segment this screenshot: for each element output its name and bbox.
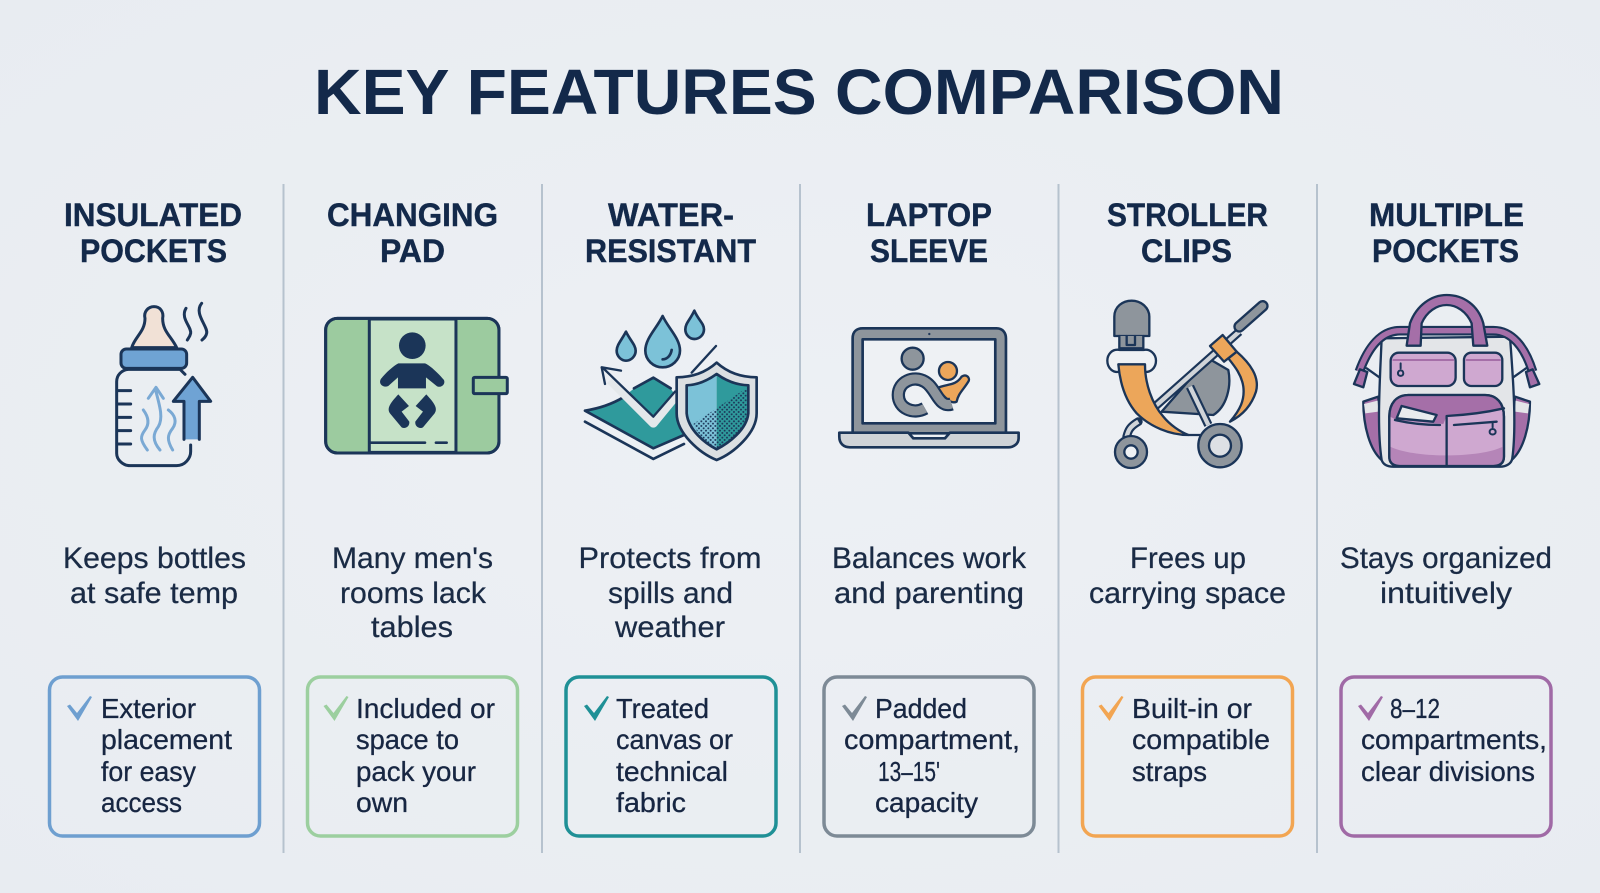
description: multiple pockets: Stays organized — [1340, 542, 1552, 575]
description: changing pad: tables — [371, 611, 453, 644]
callout: insulated pockets: for easy — [101, 756, 196, 787]
icon: water drops and shield — [585, 311, 757, 460]
description: laptop sleeve: and parenting — [834, 577, 1024, 610]
description: insulated pockets — [63, 542, 246, 610]
panel: insulated pockets — [50, 197, 260, 836]
callout: water-resistant: technical — [616, 756, 728, 787]
callout: changing pad: pack your — [356, 756, 476, 787]
callout: multiple pockets — [1341, 677, 1551, 836]
description: changing pad: Many men's — [332, 542, 493, 575]
title: KEY FEATURES COMPARISON — [314, 56, 1284, 128]
description: stroller clips — [1089, 542, 1286, 610]
callout: changing pad — [308, 677, 518, 836]
callout: changing pad: Included or — [356, 693, 495, 724]
description: changing pad: rooms lack — [340, 577, 487, 610]
panel: changing pad — [308, 197, 518, 836]
callout: multiple pockets: compartments, — [1361, 724, 1547, 755]
callout: multiple pockets: clear divisions — [1361, 756, 1535, 787]
description: water-resistant: spills and — [608, 577, 733, 610]
heading: water-resistant: WATER- — [608, 197, 734, 233]
callout: changing pad: space to — [356, 724, 459, 755]
heading: changing pad: CHANGING — [327, 197, 498, 233]
callout: stroller clips: Built-in or — [1132, 693, 1252, 724]
heading: multiple pockets: MULTIPLE — [1369, 197, 1524, 233]
heading: laptop sleeve: LAPTOP — [866, 197, 992, 233]
heading: multiple pockets — [1369, 197, 1524, 269]
description: multiple pockets: intuitively — [1380, 577, 1512, 610]
heading: stroller clips: STROLLER — [1107, 197, 1268, 233]
description: water-resistant — [578, 542, 762, 644]
callout: laptop sleeve — [824, 677, 1034, 836]
callout: stroller clips: compatible — [1132, 724, 1270, 755]
description: stroller clips: Frees up — [1130, 542, 1246, 575]
panel: water-resistant — [566, 197, 776, 836]
heading: stroller clips: CLIPS — [1141, 233, 1232, 269]
description: laptop sleeve — [832, 542, 1027, 610]
heading: water-resistant: RESISTANT — [585, 233, 756, 269]
description: insulated pockets: Keeps bottles — [63, 542, 246, 575]
heading: insulated pockets — [64, 197, 242, 269]
heading: laptop sleeve: SLEEVE — [870, 233, 988, 269]
panel: multiple pockets — [1340, 197, 1552, 836]
callout: laptop sleeve: 13–15' — [878, 756, 940, 787]
description: stroller clips: carrying space — [1089, 577, 1286, 610]
heading: insulated pockets: POCKETS — [80, 233, 227, 269]
callout: insulated pockets: Exterior — [101, 693, 196, 724]
icon: stroller with clip strap — [1107, 301, 1263, 468]
callout: insulated pockets: placement — [101, 724, 232, 755]
description: laptop sleeve: Balances work — [832, 542, 1027, 575]
callout: multiple pockets: 8–12 — [1390, 693, 1440, 724]
heading: changing pad — [327, 197, 498, 269]
icon: changing pad with baby — [326, 318, 507, 453]
description: water-resistant: weather — [614, 611, 725, 644]
callout: water-resistant — [566, 677, 776, 836]
description: changing pad — [332, 542, 493, 644]
heading: water-resistant — [585, 197, 756, 269]
heading: insulated pockets: INSULATED — [64, 197, 242, 233]
callout: water-resistant: fabric — [616, 787, 686, 818]
callout: water-resistant: Treated — [616, 693, 709, 724]
callout: water-resistant: canvas or — [616, 724, 733, 755]
heading: laptop sleeve — [866, 197, 992, 269]
callout: changing pad: own — [356, 787, 408, 818]
panel: laptop sleeve — [824, 197, 1034, 836]
callout: laptop sleeve: Padded — [875, 693, 967, 724]
description: multiple pockets — [1340, 542, 1552, 610]
icon: diaper backpack — [1354, 295, 1539, 467]
callout: laptop sleeve: compartment, — [844, 724, 1020, 755]
callout: stroller clips: straps — [1132, 756, 1207, 787]
heading: stroller clips — [1107, 197, 1268, 269]
callout: laptop sleeve: capacity — [875, 787, 978, 818]
description: water-resistant: Protects from — [578, 542, 762, 575]
panel: stroller clips — [1082, 197, 1292, 836]
callout: insulated pockets — [50, 677, 260, 836]
icon: laptop with parent and child — [839, 328, 1019, 447]
heading: changing pad: PAD — [380, 233, 445, 269]
heading: multiple pockets: POCKETS — [1372, 233, 1519, 269]
callout: insulated pockets: access — [101, 787, 182, 818]
icon: baby bottle with heat — [117, 303, 211, 466]
description: insulated pockets: at safe temp — [70, 577, 238, 610]
callout: stroller clips — [1082, 677, 1292, 836]
